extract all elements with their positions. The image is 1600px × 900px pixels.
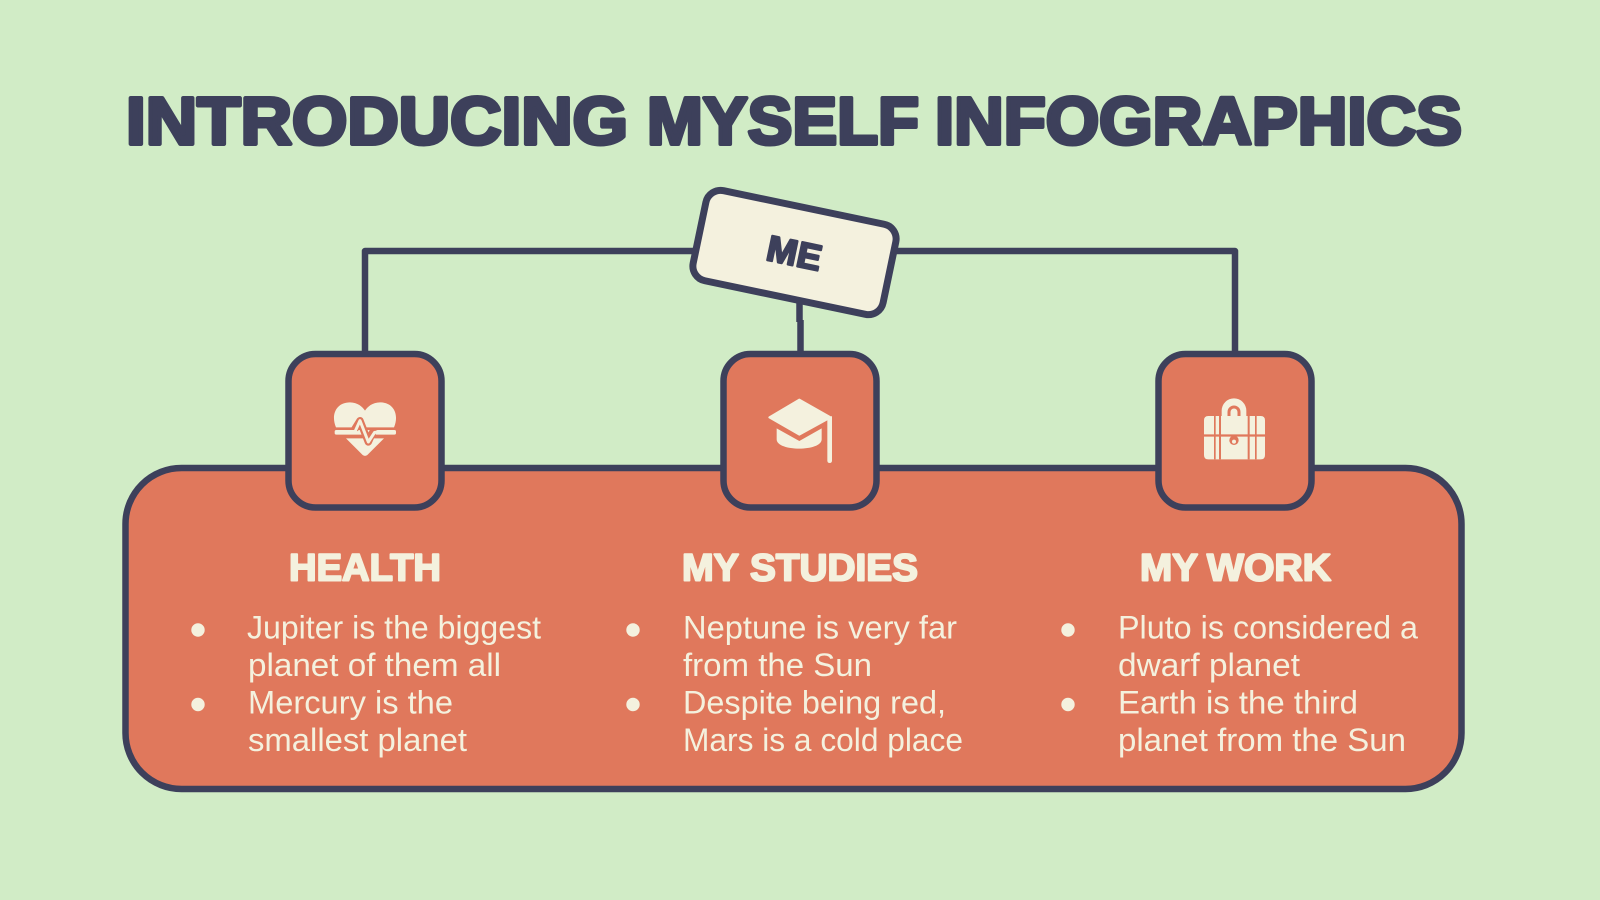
bullet list: studies: Despite being red, — [683, 684, 946, 720]
title: MYSELF — [647, 84, 919, 159]
icon box: studies — [724, 354, 876, 508]
bullet list: work: dwarf planet — [1118, 647, 1300, 683]
label: me — [690, 188, 899, 317]
icon box: work — [1158, 354, 1312, 508]
title: INFOGRAPHICS — [935, 84, 1462, 159]
bullet list: work: Earth is the third — [1118, 684, 1358, 720]
icon box: health — [288, 354, 442, 508]
bullet list: studies: Neptune is very far — [683, 610, 957, 646]
bullet list: health: planet of them all — [248, 647, 501, 683]
panel: main coral background — [126, 468, 1462, 789]
heading: my studies: MY — [682, 548, 739, 590]
heading: my work: WORK — [1207, 548, 1332, 590]
bullet list: studies: Mars is a cold place — [683, 722, 963, 758]
icon: graduation cap — [769, 400, 832, 463]
connector lines — [365, 251, 1235, 352]
bullet list: work — [1061, 610, 1418, 758]
bullet list: studies: from the Sun — [683, 647, 872, 683]
bullet list: health: smallest planet — [248, 722, 467, 758]
column: work — [1061, 548, 1418, 758]
label text: ME — [763, 227, 826, 279]
bullet list: studies — [626, 610, 963, 758]
bullet list: health — [191, 610, 541, 758]
icon: heart with pulse — [334, 402, 396, 456]
heading: my work: MY — [1140, 548, 1198, 590]
bullet list: work: Pluto is considered a — [1118, 610, 1418, 646]
icon: briefcase — [1204, 398, 1265, 459]
bullet list: work: planet from the Sun — [1118, 722, 1406, 758]
column: studies — [626, 548, 963, 758]
bullet list: health: Jupiter is the biggest — [247, 610, 541, 646]
column: health — [191, 548, 541, 758]
heading: my studies — [682, 548, 918, 590]
title — [126, 84, 1462, 159]
heading: health: HEALTH — [289, 548, 441, 590]
heading: my studies: STUDIES — [750, 548, 918, 590]
title: INTRODUCING — [126, 84, 628, 159]
heading: my work — [1140, 548, 1332, 590]
bullet list: health: Mercury is the — [248, 684, 453, 720]
